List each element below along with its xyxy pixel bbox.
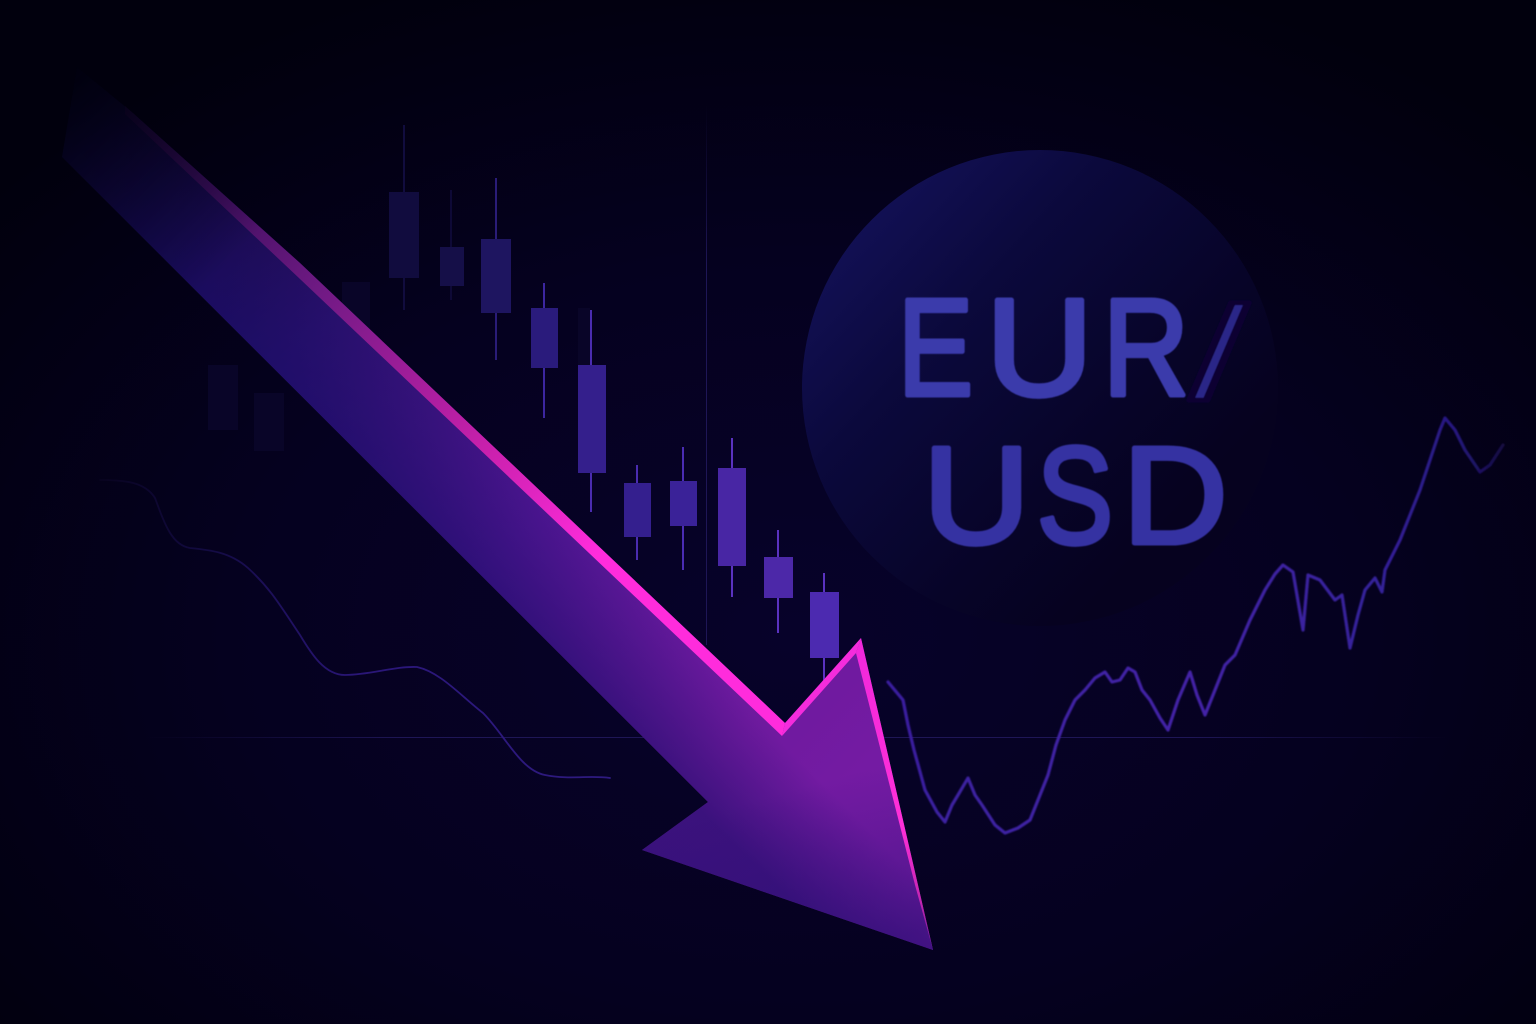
arrow shading: head bottom — [787, 796, 933, 950]
candle 4 — [531, 283, 558, 418]
label line: USD: D — [1123, 419, 1228, 573]
candle 5 — [578, 310, 606, 512]
candle 9 — [764, 530, 793, 633]
candle 6 — [624, 465, 651, 560]
price line: left — [100, 480, 610, 778]
arrow highlight: head inner edge — [782, 638, 861, 736]
label line: EUR: / — [1190, 280, 1248, 428]
faint candles — [208, 282, 590, 451]
grid line: vertical — [706, 105, 707, 645]
arrow highlight: head right edge — [856, 638, 933, 950]
candle 8 — [718, 438, 746, 597]
candle 7 — [670, 447, 697, 570]
arrow shading: lower side — [74, 166, 932, 950]
label line: EUR: E — [898, 271, 973, 425]
label line: EUR: U — [986, 271, 1093, 425]
currency disc — [802, 150, 1278, 626]
label line: USD — [923, 419, 1228, 573]
grid line: horizontal baseline — [145, 737, 1450, 738]
price line: right — [888, 418, 1503, 833]
candle 10 — [810, 573, 839, 680]
arrow body — [62, 67, 933, 950]
candle 3 — [481, 178, 511, 360]
candle 1 — [389, 125, 419, 310]
label line: USD: S — [1037, 419, 1113, 573]
currency label: EUR/USD — [898, 271, 1248, 573]
candle 2 — [440, 190, 464, 300]
label line: EUR: R — [1103, 271, 1189, 425]
label line: USD: U — [923, 419, 1030, 573]
candlestick chart — [208, 125, 839, 680]
label line: EUR — [898, 271, 1248, 428]
down arrow — [62, 67, 933, 950]
arrow highlight: shaft edge — [125, 106, 785, 736]
